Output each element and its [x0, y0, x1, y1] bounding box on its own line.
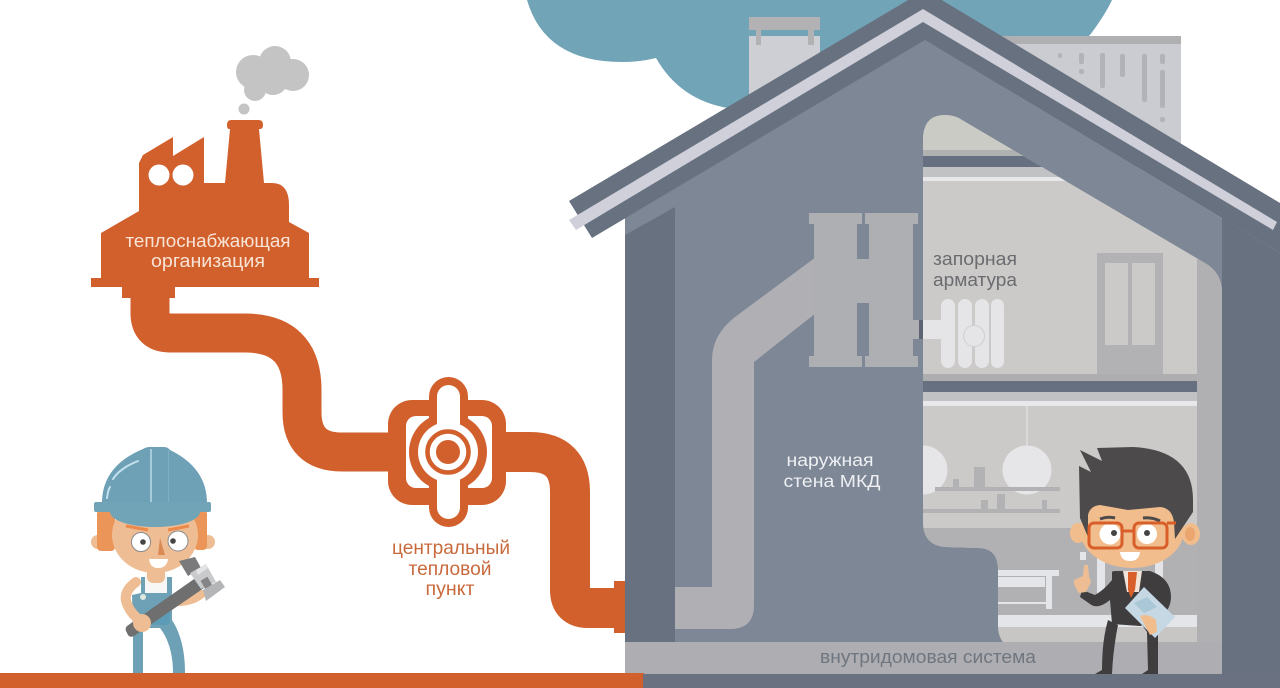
- worker eyes: [132, 531, 188, 552]
- ground slate: [643, 674, 1280, 688]
- worker nose: [158, 538, 165, 555]
- in-house system label: внутридомовая система: [820, 646, 1037, 667]
- manager face: [1080, 492, 1184, 568]
- chimney: [749, 17, 820, 126]
- shut-off valve H shape: [809, 213, 923, 367]
- worker legs and overalls: [132, 577, 185, 673]
- orange heat pipe from valve to house: [500, 452, 625, 633]
- central heating point label: пункт: [426, 578, 475, 600]
- central heating point valve: [388, 377, 506, 527]
- factory windows: [148, 164, 194, 186]
- outer wall label: наружная: [786, 450, 874, 470]
- ground orange: [0, 673, 644, 688]
- worker mouth: [149, 559, 168, 568]
- smoke cloud: [236, 46, 309, 114]
- house wall: [625, 40, 1280, 674]
- blue cloud behind the house: [527, 0, 1112, 108]
- radiator: [923, 299, 1004, 368]
- outer wall label: стена МКД: [784, 471, 881, 491]
- central heating point label: центральный: [392, 537, 510, 559]
- shut-off valve label: [933, 248, 1018, 290]
- factory label: теплоснабжающая: [126, 230, 290, 251]
- central heating point label: тепловой: [408, 558, 492, 580]
- factory label: [126, 230, 290, 271]
- lower room lamps: [923, 406, 1052, 494]
- worker character: [91, 447, 225, 673]
- worker helmet: [94, 447, 211, 527]
- manager glasses: [1089, 523, 1176, 548]
- factory: [91, 46, 319, 298]
- manager eyes: [1100, 524, 1157, 544]
- worker ears: [91, 535, 215, 549]
- factory label: организация: [151, 250, 265, 271]
- grey internal riser pipe: [675, 257, 816, 629]
- worker right arm: [178, 594, 202, 602]
- manager raised hand: [1074, 565, 1091, 593]
- worker overall pocket and button: [140, 594, 170, 625]
- shut-off valve label: запорная: [933, 248, 1017, 269]
- central heating point label: [392, 537, 510, 600]
- worker shirt and neck: [145, 566, 167, 593]
- lower room wall: [923, 528, 1197, 616]
- attic: [923, 115, 1013, 150]
- manager eyebrows: [1100, 517, 1160, 521]
- door: [1097, 253, 1163, 374]
- shut-off valve label: арматура: [933, 269, 1018, 290]
- orange heat pipe from factory to valve: [150, 295, 395, 452]
- manager ears: [1070, 523, 1200, 545]
- right wall slice: [1197, 258, 1222, 642]
- manager mouth: [1120, 552, 1140, 561]
- worker hand: [133, 614, 151, 632]
- manager legs: [1095, 620, 1158, 674]
- floor slab: [923, 374, 1197, 406]
- shelves: [923, 467, 1060, 513]
- rear building: [1002, 36, 1181, 166]
- manager holding hand: [1140, 615, 1157, 635]
- table and floor strip: [998, 552, 1197, 627]
- manager clipboard: [1125, 587, 1175, 638]
- manager character: [1070, 447, 1200, 674]
- worker left arm: [126, 582, 143, 622]
- floor band: [625, 642, 1222, 674]
- worker hammer: [126, 557, 225, 637]
- interior cutaway rooms: [898, 110, 1223, 646]
- manager shirt and tie: [1123, 571, 1142, 598]
- manager hair: [1079, 447, 1193, 539]
- roof: [569, 0, 1280, 253]
- manager suit torso: [1080, 571, 1171, 626]
- worker hair: [97, 510, 207, 551]
- outer wall label: [784, 450, 881, 491]
- worker face: [112, 497, 198, 573]
- worker eyebrows: [126, 526, 189, 530]
- lower floor strip: [998, 628, 1003, 642]
